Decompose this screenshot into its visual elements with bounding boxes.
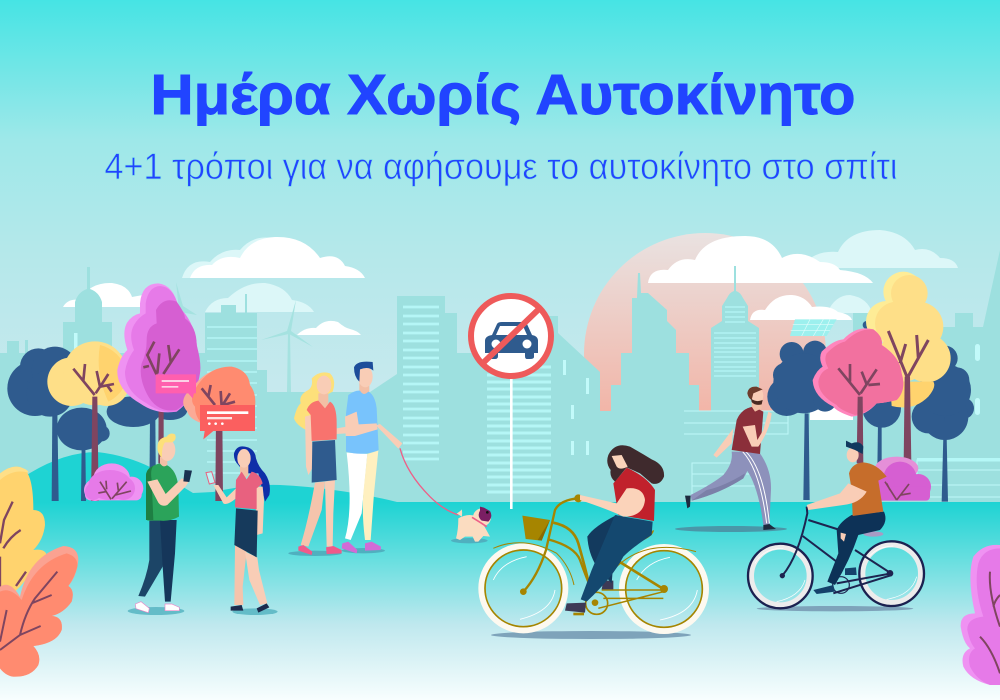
window stripes: dome tower (714, 307, 756, 376)
pink bush (84, 463, 143, 501)
pink chat bubble (156, 374, 196, 398)
man walking (342, 362, 402, 553)
pale clouds (182, 230, 958, 313)
blue tree one (7, 347, 78, 501)
blue tree two (57, 408, 110, 501)
window stripes: left tower (207, 327, 257, 473)
front wheel (481, 546, 565, 630)
bicycle frame (493, 498, 696, 614)
city skyline (0, 250, 1000, 700)
blue tree three (107, 396, 187, 501)
wind turbines (176, 282, 313, 392)
trees right group (767, 272, 974, 502)
sky background (0, 0, 1000, 400)
pink tree (813, 328, 903, 463)
cyclist front wheel (748, 544, 813, 608)
sun (584, 233, 826, 411)
blue tree five (862, 321, 901, 470)
small windows (74, 333, 980, 455)
woman with phone (206, 446, 278, 615)
woman on bicycle (481, 445, 706, 639)
cyclist (748, 441, 924, 611)
rider (565, 445, 664, 613)
no-car road sign (471, 296, 551, 509)
yellow foreground bush (0, 467, 47, 600)
cyclist figure (807, 441, 887, 594)
coral foreground bush (0, 546, 78, 677)
yellow tree right (866, 272, 951, 463)
window stripes: sign tower (487, 367, 551, 492)
left hill (0, 452, 397, 520)
title: Ημέρα Χωρίς Αυτοκίνητο (150, 63, 856, 127)
runner (675, 387, 787, 532)
coral tree (183, 367, 255, 501)
red chat bubble (200, 405, 255, 439)
pink foreground bush (961, 545, 1000, 685)
walking couple with dog (288, 362, 491, 556)
pug dog (451, 507, 491, 543)
blue tree six (912, 346, 974, 502)
cyclist rear wheel (859, 541, 924, 606)
white clouds (63, 237, 365, 335)
sign disc (471, 296, 551, 376)
purple bush right (872, 457, 931, 501)
rear wheel (622, 547, 706, 631)
prohibition bar (483, 308, 540, 363)
ground (0, 502, 1000, 700)
window stripes: centre tower (403, 307, 439, 459)
white clouds over sun (648, 236, 873, 320)
outlined low buildings (684, 411, 1000, 500)
solar panel (790, 319, 837, 336)
cyclist frame (782, 507, 892, 593)
bicycle basket (522, 516, 550, 541)
woman walking (288, 372, 347, 556)
trees left group (7, 283, 255, 501)
yellow tree (47, 341, 129, 501)
man with phone (128, 434, 192, 615)
purple tree (117, 283, 200, 463)
blue tree four (767, 341, 837, 500)
car icon (485, 322, 538, 359)
sign pole (510, 375, 513, 509)
subtitle: 4+1 τρόποι για να αφήσουμε το αυτοκίνητο στο σπίτι (104, 146, 898, 187)
dog leash (400, 448, 458, 515)
